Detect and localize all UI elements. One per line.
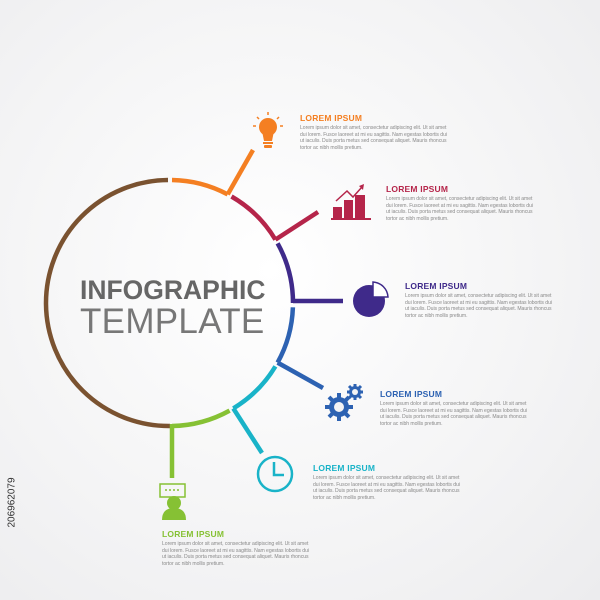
text block: orange: LOREM IPSUM: [300, 113, 362, 123]
icon: bulb: [253, 112, 283, 148]
text block: green: Lorem ipsum dolor sit amet, consectetur adipiscing elit. Ut sit amet dui lorem. Fusce laoreet at mi eu sagittis. Nam egestas lobortis dui ut iaculis. Duis porta metus sed consequat aliquet. Mauris rhoncus tortor ac nibh mollis pretium.: [162, 541, 309, 567]
text block: teal: [313, 463, 460, 501]
text block: crimson: Lorem ipsum dolor sit amet, consectetur adipiscing elit. Ut sit amet dui lorem. Fusce laoreet at mi eu sagittis. Nam egestas lobortis dui ut iaculis. Duis porta metus sed consequat aliquet. Mauris rhoncus tortor ac nibh mollis pretium.: [386, 196, 533, 222]
side id text: 206962079: [6, 477, 18, 528]
title: [80, 275, 266, 341]
icon: bar chart: [331, 184, 371, 220]
text block: crimson: [386, 184, 533, 222]
text block: green: [162, 529, 309, 567]
text block: teal: LOREM IPSUM: [313, 463, 375, 473]
text block: purple: Lorem ipsum dolor sit amet, consectetur adipiscing elit. Ut sit amet dui lorem. Fusce laoreet at mi eu sagittis. Nam egestas lobortis dui ut iaculis. Duis porta metus sed consequat aliquet. Mauris rhoncus tortor ac nibh mollis pretium.: [405, 293, 552, 319]
connectors: [172, 150, 343, 478]
text block: teal: Lorem ipsum dolor sit amet, consectetur adipiscing elit. Ut sit amet dui lorem. Fusce laoreet at mi eu sagittis. Nam egestas lobortis dui ut iaculis. Duis porta metus sed consequat aliquet. Mauris rhoncus tortor ac nibh mollis pretium.: [313, 475, 460, 501]
icon: clock: [258, 457, 292, 491]
text block: green: LOREM IPSUM: [162, 529, 224, 539]
icon: gears: [325, 384, 363, 421]
circle ring segments: [46, 180, 293, 426]
text block: blue: LOREM IPSUM: [380, 389, 442, 399]
text block: purple: LOREM IPSUM: [405, 281, 467, 291]
title: INFOGRAPHIC: [80, 275, 266, 305]
text block: purple: [405, 281, 552, 319]
text block: orange: Lorem ipsum dolor sit amet, consectetur adipiscing elit. Ut sit amet dui lorem. Fusce laoreet at mi eu sagittis. Nam egestas lobortis dui ut iaculis. Duis porta metus sed consequat aliquet. Mauris rhoncus tortor ac nibh mollis pretium.: [300, 125, 447, 151]
text block: blue: [380, 389, 527, 427]
text block: orange: [300, 113, 447, 151]
icon: person with speech: [160, 484, 186, 520]
icon: pie chart: [353, 282, 388, 317]
title: TEMPLATE: [80, 302, 265, 341]
text block: blue: Lorem ipsum dolor sit amet, consectetur adipiscing elit. Ut sit amet dui lorem. Fusce laoreet at mi eu sagittis. Nam egestas lobortis dui ut iaculis. Duis porta metus sed consequat aliquet. Mauris rhoncus tortor ac nibh mollis pretium.: [380, 401, 527, 427]
text block: crimson: LOREM IPSUM: [386, 184, 448, 194]
